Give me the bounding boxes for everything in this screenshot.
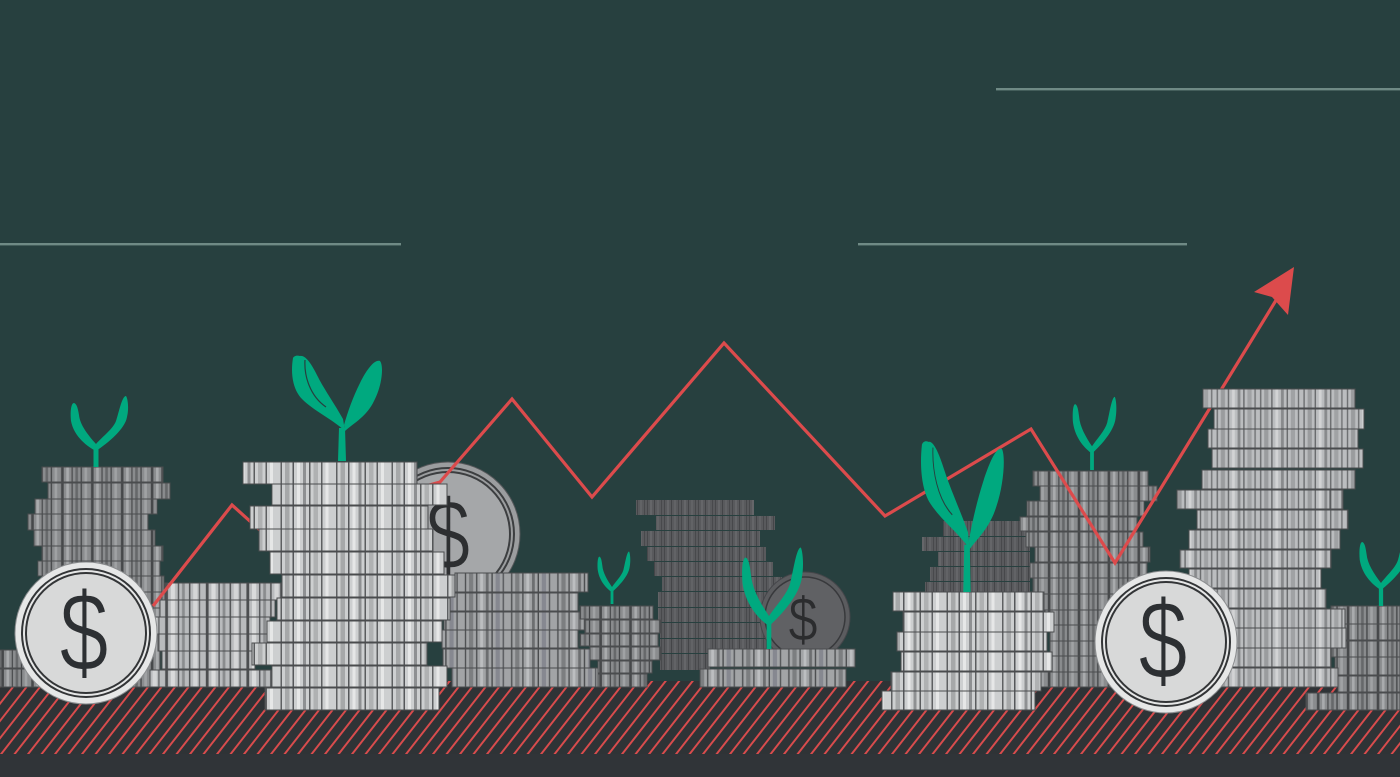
coin stack: small front centre — [700, 649, 855, 687]
coin stack: bottom right — [1306, 606, 1400, 710]
coin stack: light front right — [882, 592, 1054, 710]
coin stack: mid right — [1020, 471, 1157, 687]
coin stack: far left — [0, 467, 170, 687]
dollar coin: left: $ — [59, 571, 109, 695]
seedling: on small front stack — [742, 547, 803, 649]
seedling: large on front right stack — [921, 441, 1004, 592]
seedling: small centre — [598, 551, 630, 604]
arrow head — [1254, 267, 1294, 315]
coin stack: tall right — [1177, 389, 1364, 687]
coin stack: beside left coin — [150, 583, 281, 687]
dollar coin: right: $ — [1138, 579, 1188, 703]
big grey coin behind stack — [376, 462, 520, 606]
seedling: large on light stack — [292, 356, 382, 461]
hatched ground — [0, 681, 1400, 754]
bottom band — [0, 754, 1400, 777]
seedling: mid right — [1073, 397, 1116, 470]
coin stack: large light left — [243, 462, 455, 710]
coin stack: behind light stack — [922, 521, 1030, 594]
seedling: far right — [1359, 535, 1400, 606]
coin stack: dark tall — [636, 500, 782, 670]
coin stack: centre left — [442, 573, 600, 687]
dollar coin: left — [15, 562, 157, 704]
big grey coin behind stack: $ — [426, 480, 470, 591]
dark coin — [760, 572, 850, 662]
dollar coin: right — [1095, 571, 1237, 713]
growth line — [153, 297, 1278, 606]
seedling: far left — [71, 396, 128, 467]
dark coin: $ — [788, 586, 818, 655]
coin stack: small centre — [580, 606, 661, 687]
